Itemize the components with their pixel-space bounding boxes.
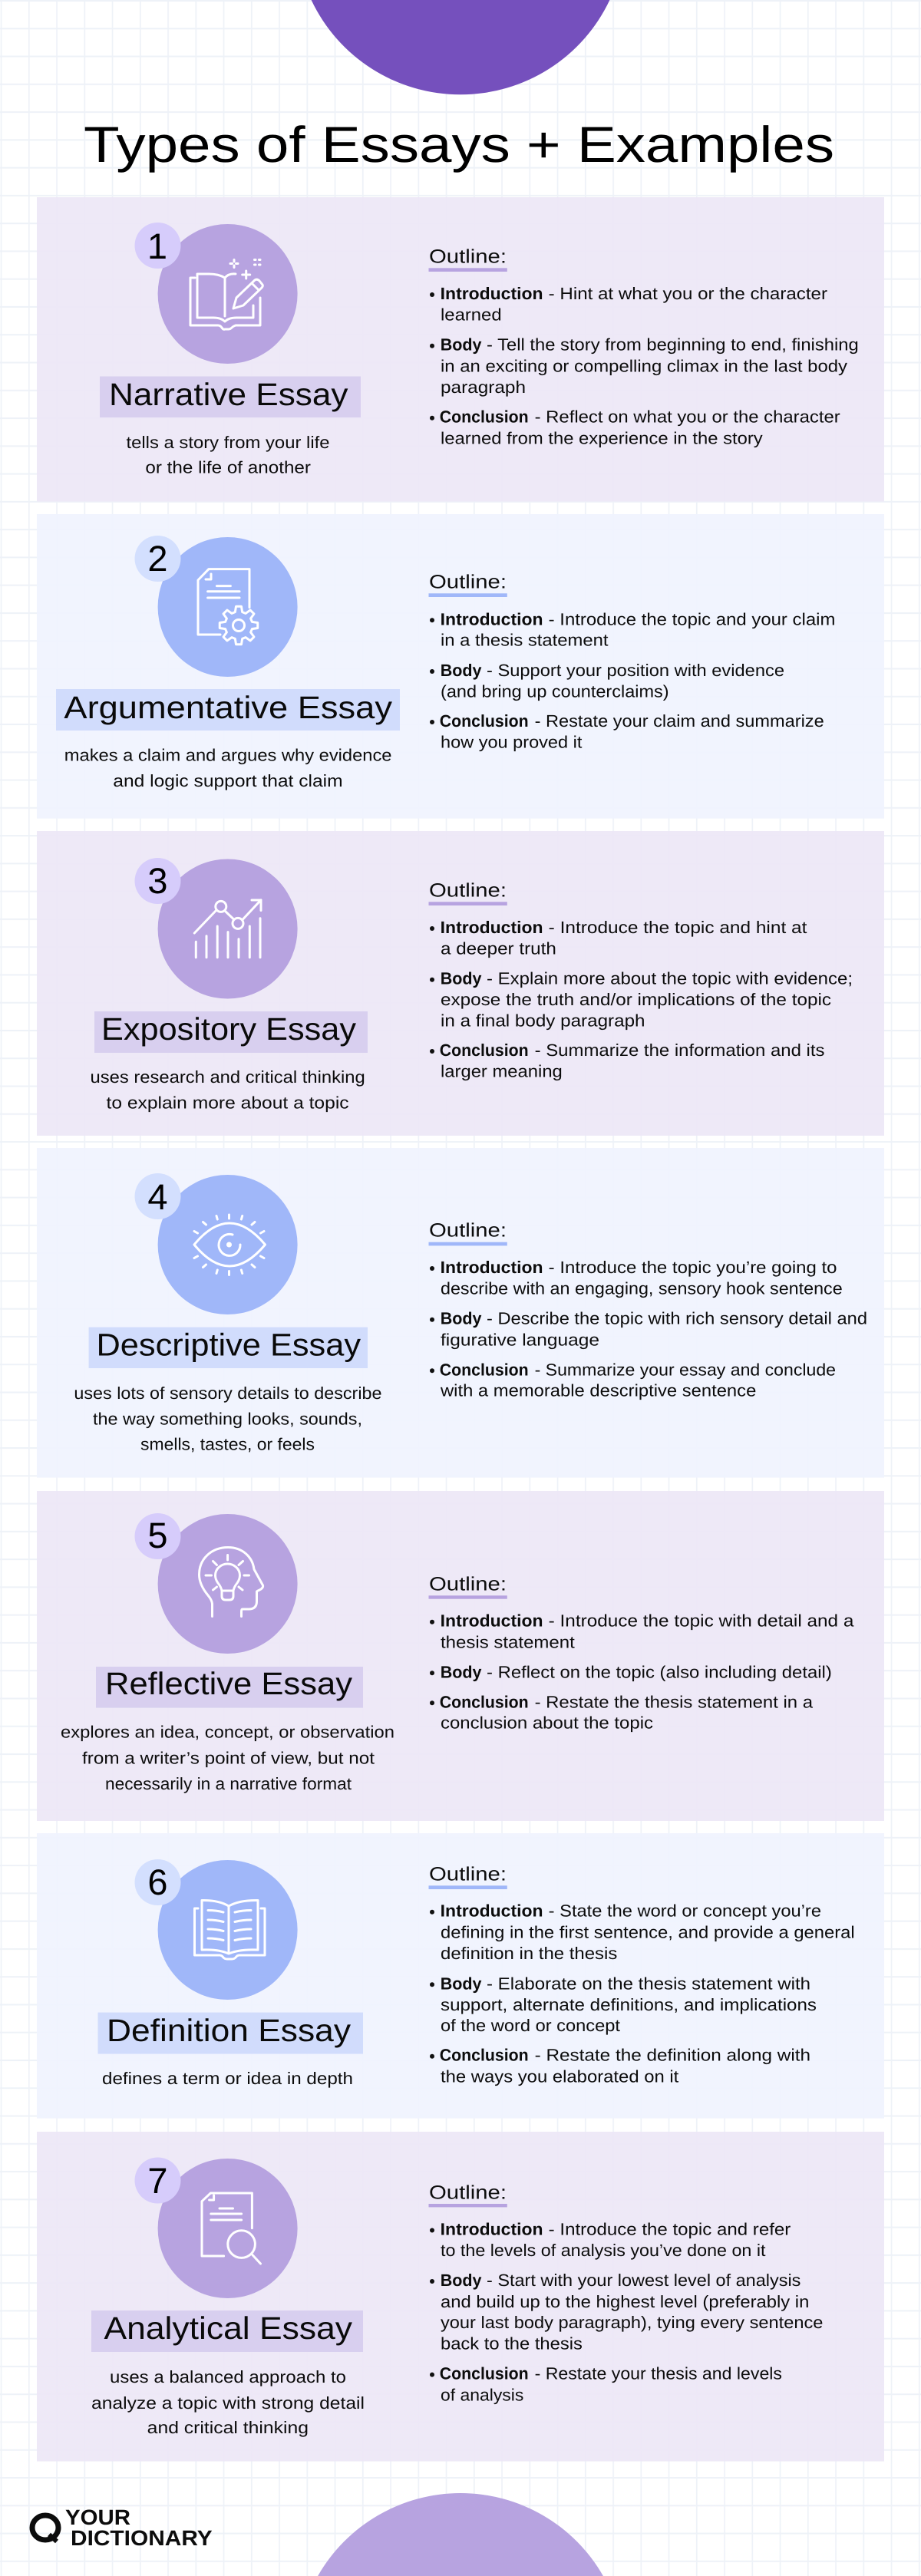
outline list: analytical: - Introduce the topic and refer	[549, 2219, 791, 2239]
number badge 2: 2	[147, 538, 168, 579]
outline heading: expository	[428, 879, 507, 905]
description: descriptive: the way something looks, sounds,	[93, 1409, 362, 1429]
essay name: narrative: Narrative Essay	[109, 377, 348, 412]
outline list: definition: the ways you elaborated on it	[441, 2067, 678, 2086]
panel: descriptive essay	[37, 1148, 884, 1478]
number badge 3	[135, 858, 181, 904]
outline list: descriptive: Body	[441, 1309, 482, 1328]
panel: definition essay	[37, 1833, 884, 2119]
outline list: definition: Conclusion	[440, 2046, 529, 2065]
panel: argumentative essay	[37, 514, 884, 819]
panel: reflective essay	[37, 1491, 884, 1821]
outline list: argumentative: how you proved it	[441, 732, 582, 751]
outline heading: descriptive	[428, 1220, 507, 1245]
outline heading: expository: Outline:	[429, 879, 507, 901]
icon circle: expository	[158, 859, 298, 999]
outline list: descriptive: figurative language	[441, 1330, 599, 1349]
outline list: definition: defining in the first sentence, and provide a general	[441, 1922, 855, 1941]
outline list: analytical: Conclusion	[440, 2364, 529, 2383]
icon: document and gear	[198, 569, 258, 645]
outline list: reflective: Introduction	[441, 1611, 543, 1631]
icon: book and pencil	[190, 259, 262, 329]
bottom decorative circle	[318, 2493, 603, 2576]
outline list: argumentative: Body	[441, 661, 482, 680]
outline list: reflective: - Introduce the topic with detail and a	[549, 1611, 854, 1631]
outline list: definition: Introduction	[441, 1901, 543, 1921]
outline list: expository: Conclusion	[440, 1041, 529, 1060]
outline list: analytical: and build up to the highest level (preferably in	[441, 2292, 809, 2311]
outline heading: definition: Outline:	[429, 1864, 507, 1885]
outline list: expository	[430, 918, 853, 1080]
outline heading: narrative: Outline:	[429, 246, 507, 268]
number badge 7: 7	[147, 2160, 168, 2201]
number badge 5: 5	[147, 1515, 168, 1555]
outline list: analytical: of analysis	[441, 2385, 523, 2405]
outline heading: reflective: Outline:	[429, 1574, 507, 1595]
outline list: narrative: learned from the experience in the story	[441, 428, 763, 447]
description: expository: to explain more about a topic	[106, 1093, 349, 1113]
outline list: descriptive: Introduction	[441, 1258, 543, 1277]
icon: logo Q mark	[32, 2515, 58, 2541]
outline heading: argumentative: Outline:	[429, 572, 507, 593]
outline list: argumentative: (and bring up counterclaims)	[441, 681, 669, 701]
outline list: expository: Body	[441, 969, 482, 988]
description: analytical: uses a balanced approach to	[110, 2367, 346, 2386]
outline list: narrative: Conclusion	[440, 407, 529, 427]
outline list: definition: - Restate the definition along with	[535, 2046, 810, 2065]
description: analytical: and critical thinking	[147, 2418, 309, 2437]
outline list: narrative	[430, 284, 859, 447]
outline list: reflective: - Reflect on the topic (also including detail)	[487, 1662, 832, 1681]
outline list: descriptive: - Summarize your essay and conclude	[535, 1360, 836, 1379]
outline list: expository: larger meaning	[441, 1061, 563, 1080]
outline heading: descriptive: Outline:	[429, 1220, 507, 1242]
description: descriptive: uses lots of sensory details to describe	[74, 1384, 382, 1403]
essay name: expository: Expository Essay	[101, 1011, 357, 1047]
icon: eye	[194, 1215, 266, 1275]
number badge 4	[135, 1173, 181, 1219]
description: analytical	[91, 2367, 365, 2437]
outline list: narrative: learned	[441, 305, 502, 324]
number badge 2	[135, 536, 181, 582]
outline list: reflective: Body	[441, 1662, 482, 1681]
outline list: descriptive: Conclusion	[440, 1360, 529, 1379]
description: analytical: analyze a topic with strong detail	[91, 2393, 365, 2413]
outline list: definition: definition in the thesis	[441, 1944, 617, 1963]
number badge 5	[135, 1513, 181, 1559]
outline list: definition: - Elaborate on the thesis statement with	[487, 1974, 810, 1993]
outline list: descriptive: with a memorable descriptive sentence	[440, 1381, 756, 1400]
outline list: analytical: to the levels of analysis you’ve done on it	[441, 2241, 766, 2260]
icon circle: reflective	[158, 1514, 298, 1654]
outline list: expository: in a final body paragraph	[441, 1011, 645, 1030]
essay name: definition: Definition Essay	[107, 2013, 352, 2048]
outline list: expository: - Introduce the topic and hint at	[549, 918, 807, 937]
outline list: argumentative: - Restate your claim and summarize	[535, 711, 824, 731]
number badge 1	[135, 223, 181, 269]
outline list: reflective	[430, 1611, 854, 1733]
outline list: argumentative: Conclusion	[440, 711, 529, 731]
outline list: descriptive: - Introduce the topic you’re going to	[549, 1258, 837, 1277]
description: narrative	[126, 433, 330, 477]
description: narrative: tells a story from your life	[126, 433, 330, 452]
outline list: reflective: Conclusion	[440, 1692, 529, 1711]
outline list: expository: a deeper truth	[441, 938, 556, 958]
number badge 1: 1	[147, 226, 167, 266]
icon: head with light bulb	[200, 1547, 263, 1616]
outline list: analytical: - Restate your thesis and levels	[535, 2364, 782, 2383]
logo wordmark: YOUR	[65, 2505, 130, 2529]
outline list: expository: - Explain more about the topic with evidence;	[487, 969, 853, 988]
description: reflective: explores an idea, concept, or observation	[61, 1723, 394, 1742]
outline list: descriptive: - Describe the topic with rich sensory detail and	[487, 1309, 867, 1328]
description: reflective	[61, 1723, 394, 1793]
icon: rising chart	[194, 900, 261, 958]
outline list: analytical: - Start with your lowest level of analysis	[487, 2271, 801, 2290]
outline list: argumentative: - Introduce the topic and your claim	[549, 609, 835, 628]
outline list: expository: - Summarize the information and its	[535, 1041, 824, 1060]
description: descriptive: smells, tastes, or feels	[140, 1435, 315, 1454]
description: definition: defines a term or idea in depth	[102, 2069, 353, 2088]
outline list: analytical: Introduction	[441, 2219, 543, 2239]
number badge 4: 4	[147, 1176, 168, 1217]
outline list: argumentative: - Support your position with evidence	[487, 661, 784, 680]
logo wordmark	[65, 2505, 213, 2550]
description: argumentative: makes a claim and argues why evidence	[64, 746, 392, 765]
essay name: descriptive: Descriptive Essay	[97, 1328, 361, 1363]
description: descriptive	[74, 1384, 382, 1454]
description: expository	[91, 1067, 365, 1113]
outline list: expository: expose the truth and/or implications of the topic	[441, 990, 831, 1009]
icon circle: descriptive	[158, 1175, 298, 1314]
icon circle: definition	[158, 1860, 298, 2000]
icon circle: narrative	[158, 224, 298, 364]
outline list: argumentative: in a thesis statement	[441, 631, 608, 650]
logo: YourDictionary	[32, 2505, 213, 2550]
essay name: argumentative: Argumentative Essay	[64, 690, 393, 725]
outline list: narrative: - Reflect on what you or the character	[535, 407, 840, 427]
outline list: analytical: back to the thesis	[441, 2334, 583, 2353]
outline list: descriptive: describe with an engaging, sensory hook sentence	[441, 1279, 843, 1298]
outline list: argumentative: Introduction	[441, 609, 543, 628]
outline list: reflective: thesis statement	[441, 1632, 575, 1651]
outline list: narrative: Introduction	[441, 284, 543, 303]
title: Types of Essays + Examples	[84, 116, 834, 173]
icon circle: analytical	[158, 2159, 298, 2298]
outline list: narrative: paragraph	[441, 378, 526, 397]
outline list: definition	[430, 1901, 855, 2086]
outline list: descriptive	[430, 1258, 867, 1400]
outline list: definition: support, alternate definitions, and implications	[441, 1995, 817, 2014]
number badge 6: 6	[147, 1862, 168, 1902]
outline heading: analytical: Outline:	[429, 2182, 507, 2203]
outline list: analytical: Body	[441, 2271, 482, 2290]
essay name: analytical: Analytical Essay	[104, 2310, 353, 2346]
logo wordmark: DICTIONARY	[71, 2526, 213, 2550]
description: argumentative: and logic support that claim	[113, 771, 343, 790]
outline list: narrative: in an exciting or compelling climax in the last body	[441, 356, 847, 375]
panel: narrative essay	[37, 197, 884, 502]
number badge 3: 3	[147, 860, 168, 901]
outline list: narrative: - Hint at what you or the character	[549, 284, 827, 303]
outline list: expository: Introduction	[441, 918, 543, 937]
outline list: narrative: Body	[441, 335, 482, 355]
outline list: narrative: - Tell the story from beginning to end, finishing	[487, 335, 859, 355]
description: reflective: from a writer’s point of view, but not	[82, 1748, 375, 1767]
outline list: analytical: your last body paragraph), tying every sentence	[441, 2313, 823, 2332]
outline list: definition: Body	[441, 1974, 482, 1993]
outline list: definition: of the word or concept	[441, 2016, 620, 2035]
outline list: definition: - State the word or concept you’re	[549, 1901, 821, 1921]
panel: analytical essay	[37, 2132, 884, 2462]
outline list: argumentative	[430, 609, 835, 751]
essay name: reflective: Reflective Essay	[105, 1666, 353, 1701]
panel: expository essay	[37, 831, 884, 1136]
icon circle: argumentative	[158, 537, 298, 677]
description: expository: uses research and critical thinking	[91, 1067, 365, 1087]
number badge 6	[135, 1859, 181, 1905]
description: reflective: necessarily in a narrative format	[105, 1774, 352, 1793]
number badge 7	[135, 2158, 181, 2204]
outline list: reflective: - Restate the thesis statement in a	[535, 1692, 814, 1711]
top decorative circle	[312, 0, 609, 94]
description: argumentative	[64, 746, 392, 790]
outline list: reflective: conclusion about the topic	[441, 1713, 653, 1733]
description: narrative: or the life of another	[145, 458, 311, 477]
icon: open book	[195, 1900, 265, 1959]
outline list: analytical	[430, 2219, 823, 2405]
icon: document and magnifier	[202, 2193, 261, 2264]
